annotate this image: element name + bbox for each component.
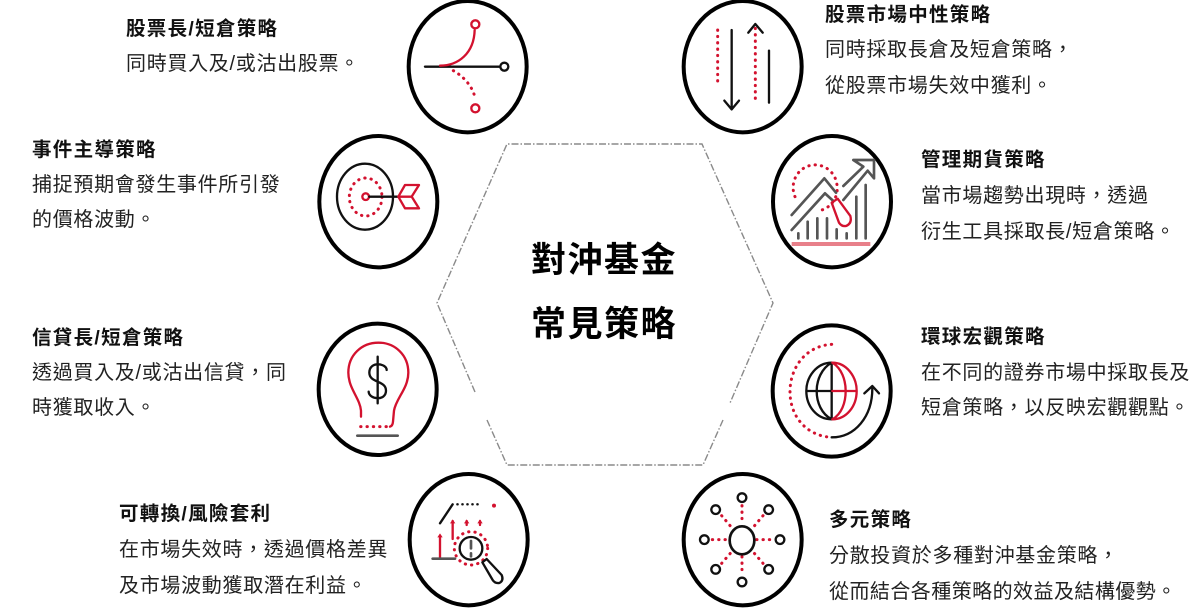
- icon: globe with rotation arrow: [773, 325, 891, 457]
- icon: magnifier over rising arrows: [410, 474, 528, 605]
- text: convertible arbitrage: 及市場波動獲取潛在利益。: [119, 574, 367, 597]
- icon: target and arrow: [319, 136, 437, 267]
- title: [531, 241, 677, 344]
- text: long short equity: 股票長/短倉策略: [126, 17, 278, 40]
- text: managed futures: 管理期貨策略: [921, 148, 1046, 171]
- text: equity market neutral: 股票市場中性策略: [825, 3, 991, 26]
- text: managed futures: 當市場趨勢出現時，透過: [921, 184, 1149, 207]
- text: global macro: 環球宏觀策略: [921, 325, 1046, 348]
- icon: trend chart with magnifier: [773, 136, 891, 267]
- text: global macro: 在不同的證券市場中採取長及: [921, 361, 1190, 384]
- text: long short credit: 時獲取收入。: [32, 396, 156, 419]
- text: global macro: [921, 325, 1190, 419]
- text: multi-strategy: 多元策略: [829, 508, 912, 531]
- text: equity market neutral: 從股票市場失效中獲利。: [825, 74, 1053, 97]
- text: convertible arbitrage: 可轉換/風險套利: [119, 502, 271, 525]
- text: long short credit: [32, 326, 287, 419]
- text: convertible arbitrage: 在市場失效時，透過價格差異: [119, 538, 388, 561]
- text: multi-strategy: 分散投資於多種對沖基金策略，: [829, 544, 1119, 567]
- panel: central hexagon: [437, 144, 773, 465]
- icon: light bulb with dollar sign: [319, 324, 437, 455]
- text: long short equity: 同時買入及/或沽出股票。: [126, 52, 360, 75]
- text: event driven: 的價格波動。: [32, 208, 156, 231]
- text: event driven: 事件主導策略: [32, 138, 157, 161]
- text: long short credit: 透過買入及/或沽出信貸，同: [32, 361, 287, 384]
- text: equity market neutral: [825, 3, 1073, 97]
- text: multi-strategy: 從而結合各種策略的效益及結構優勢。: [829, 580, 1177, 603]
- title: 對沖基金: [531, 241, 677, 280]
- icon: up and down arrows: [684, 1, 802, 132]
- text: multi-strategy: [829, 508, 1177, 603]
- text: convertible arbitrage: [119, 502, 388, 597]
- text: long short equity: [126, 17, 360, 75]
- title: 常見策略: [531, 305, 677, 344]
- text: managed futures: 衍生工具採取長/短倉策略。: [921, 220, 1176, 243]
- text: long short credit: 信貸長/短倉策略: [32, 326, 184, 349]
- text: equity market neutral: 同時採取長倉及短倉策略，: [825, 38, 1073, 61]
- text: event driven: 捕捉預期會發生事件所引發: [32, 173, 280, 196]
- icon: long short branching lines: [409, 1, 527, 132]
- text: global macro: 短倉策略，以反映宏觀觀點。: [921, 396, 1190, 419]
- text: event driven: [32, 138, 280, 231]
- text: managed futures: [921, 148, 1176, 243]
- icon: hub and spokes: [684, 474, 802, 605]
